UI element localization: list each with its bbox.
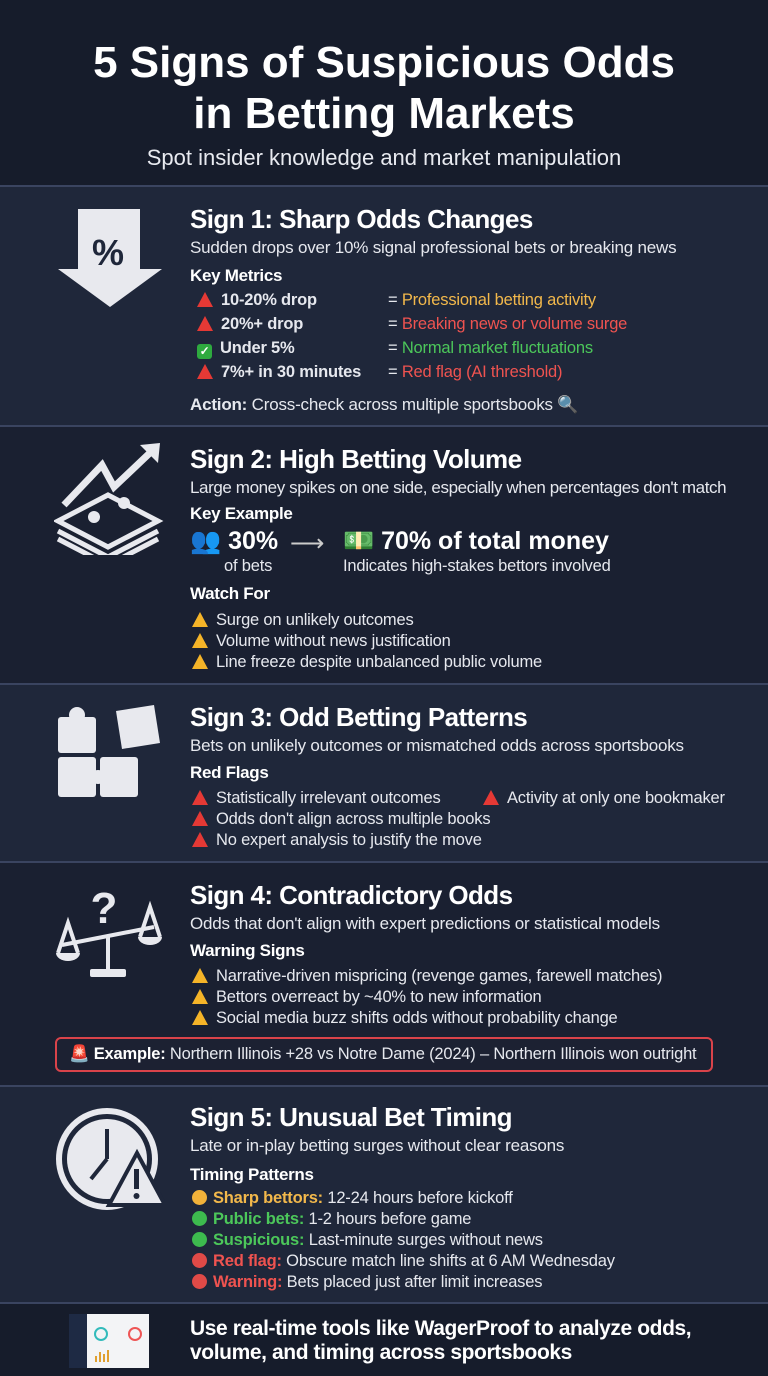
warning signs: Narrative-driven mispricing (revenge games, farewell matches) [216,967,662,985]
panel: sign 4 [0,861,768,1085]
warning signs: Bettors overreact by ~40% to new information [216,988,542,1006]
key example: Indicates high-stakes bettors involved [343,557,611,575]
panel: sign 5 [0,1085,768,1302]
key metrics: = Normal market fluctuations [388,339,593,357]
timing patterns [190,1165,615,1291]
icon: puzzle [58,705,160,797]
key example: of bets [224,557,272,575]
heading: Sign 3: Odd Betting Patterns [190,702,527,732]
key example: 💵 70% of total money [343,527,609,555]
key metrics: Under 5% [220,339,295,357]
description: Sudden drops over 10% signal professional bets or breaking news [190,238,676,257]
red flags: Red Flags [190,763,269,782]
footer text: volume, and timing across sportsbooks [190,1341,572,1364]
watch for: Line freeze despite unbalanced public volume [216,653,542,671]
timing patterns: Sharp bettors: 12-24 hours before kickoff [213,1189,513,1207]
heading: Sign 2: High Betting Volume [190,444,521,474]
panel: sign 2 [0,425,768,683]
description: Odds that don't align with expert predictions or statistical models [190,914,660,933]
footer [0,1302,768,1376]
icon: dashboard screenshot [69,1314,149,1368]
timing patterns: Warning: Bets placed just after limit increases [213,1273,542,1291]
red flags: Activity at only one bookmaker [507,789,725,807]
key metrics: Key Metrics [190,266,282,285]
watch for: Watch For [190,584,270,603]
warning signs [190,941,662,1027]
timing patterns: Timing Patterns [190,1165,314,1184]
key metrics: 20%+ drop [221,315,303,333]
icon: scale with question mark: ? [91,884,117,933]
footer text: Use real-time tools like WagerProof to analyze odds, [190,1317,691,1340]
heading: Sign 5: Unusual Bet Timing [190,1102,512,1132]
timing patterns: Red flag: Obscure match line shifts at 6 AM Wednesday [213,1252,615,1270]
watch for [190,584,542,671]
icon: down arrow percent: % [92,232,124,273]
timing patterns: Public bets: 1-2 hours before game [213,1210,471,1228]
icon: down arrow percent [58,209,162,307]
icon: clock with warning [56,1108,162,1210]
watch for: Surge on unlikely outcomes [216,611,414,629]
icon: money stack with arrow [54,443,164,555]
callout: example: 🚨 Example: Northern Illinois +28 vs Notre Dame (2024) – Northern Illinois won outright [69,1045,696,1063]
key metrics: = Professional betting activity [388,291,596,309]
watch for: Volume without news justification [216,632,451,650]
key metrics: = Breaking news or volume surge [388,315,627,333]
footer text [190,1317,691,1364]
red flags: Odds don't align across multiple books [216,810,490,828]
title [93,38,675,138]
key example: ⟶ [290,530,324,557]
key example: 👥 30% [190,527,278,555]
key metrics: 10-20% drop [221,291,317,309]
description: Large money spikes on one side, especially when percentages don't match [190,478,726,497]
red flags [190,763,725,849]
description: Late or in-play betting surges without clear reasons [190,1136,564,1155]
timing patterns: Suspicious: Last-minute surges without news [213,1231,543,1249]
header [0,0,768,185]
key metrics: Action: Cross-check across multiple sportsbooks 🔍 [190,395,578,414]
panel: sign 3 [0,683,768,861]
heading: Sign 4: Contradictory Odds [190,880,512,910]
key metrics [190,266,627,414]
warning signs: Social media buzz shifts odds without probability change [216,1009,618,1027]
red flags: Statistically irrelevant outcomes [216,789,440,807]
key metrics: ✓ [200,344,209,358]
panel: sign 1 [0,185,768,425]
title: in Betting Markets [193,89,575,138]
key metrics: 7%+ in 30 minutes [221,363,361,381]
key example [190,504,611,575]
description: Bets on unlikely outcomes or mismatched odds across sportsbooks [190,736,684,755]
title: 5 Signs of Suspicious Odds [93,38,675,87]
red flags: No expert analysis to justify the move [216,831,482,849]
heading: Sign 1: Sharp Odds Changes [190,204,533,234]
subtitle: Spot insider knowledge and market manipulation [147,145,621,170]
key example: Key Example [190,504,293,523]
callout: example [55,1037,713,1072]
key metrics: = Red flag (AI threshold) [388,363,562,381]
warning signs: Warning Signs [190,941,304,960]
icon: scale with question mark [56,884,162,977]
